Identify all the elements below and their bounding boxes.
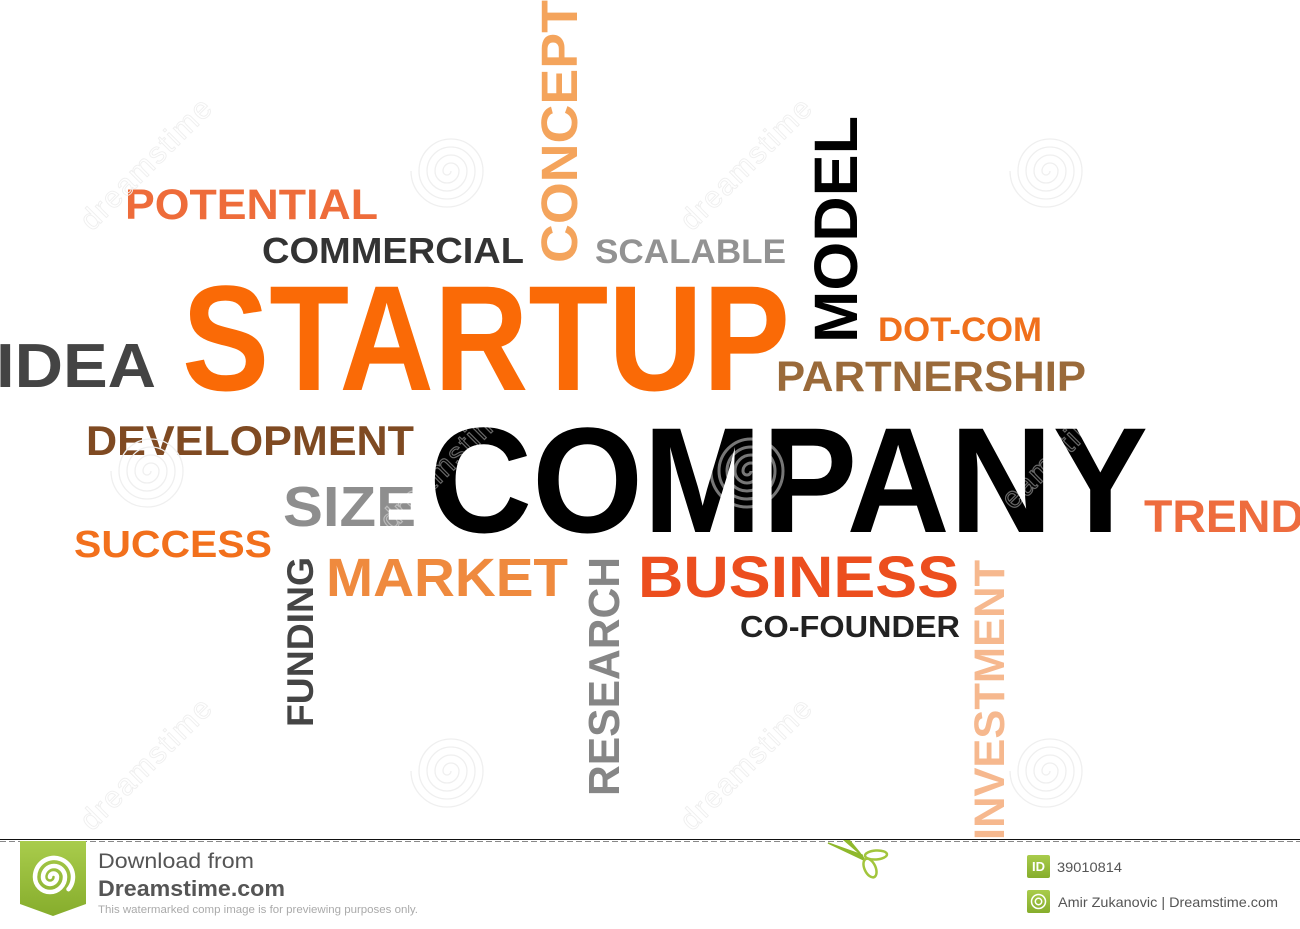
footer divider [0, 840, 1300, 842]
watermark text 1: dreamstime [74, 92, 219, 237]
word: COMPANY: COMPANY [429, 396, 1148, 564]
footer text: author credit: Amir Zukanovic | Dreamstime.com [1058, 894, 1278, 910]
footer text: preview notice: This watermarked comp image is for previewing purposes only. [98, 904, 418, 916]
word: SUCCESS: SUCCESS [74, 524, 272, 566]
icon: scissors [828, 840, 887, 879]
footer text: download from: Download from [98, 850, 254, 873]
watermark pattern on white [74, 92, 1082, 837]
word: DOT-COM: DOT-COM [878, 311, 1042, 349]
word: MODEL: MODEL [802, 116, 870, 343]
word: PARTNERSHIP: PARTNERSHIP [776, 353, 1086, 401]
word: BUSINESS: BUSINESS [638, 545, 959, 610]
watermark spiral bottom centre [411, 739, 483, 807]
watermark text 4: dreamstime [674, 692, 819, 837]
word: POTENTIAL: POTENTIAL [125, 181, 378, 229]
word: RESEARCH: RESEARCH [580, 557, 629, 796]
word: TREND: TREND [1144, 491, 1300, 542]
icon: copyright badge [1027, 890, 1050, 913]
icon: green ribbon badge [20, 841, 86, 916]
watermark spiral top right [1010, 139, 1082, 207]
icon: ID badge: ID [1032, 859, 1045, 874]
word: FUNDING: FUNDING [280, 557, 321, 727]
word: INVESTMENT: INVESTMENT [966, 560, 1014, 840]
footer text: image id: 39010814 [1057, 859, 1122, 875]
icon: ID badge [1027, 855, 1050, 878]
footer text: Dreamstime.com: Dreamstime.com [98, 876, 285, 901]
word: IDEA: IDEA [0, 332, 156, 401]
word: COMMERCIAL: COMMERCIAL [262, 230, 524, 271]
watermark pattern over dark letters [383, 427, 1082, 526]
watermark text 2: dreamstime [674, 92, 819, 237]
word: STARTUP: STARTUP [182, 254, 790, 422]
watermark text on COMPANY right: dreamstime [974, 392, 1119, 537]
watermark text 3: dreamstime [74, 692, 219, 837]
word: SIZE: SIZE [283, 475, 416, 539]
watermark spiral bottom right [1010, 739, 1082, 807]
watermark spiral mid left [111, 439, 183, 507]
word: CO-FOUNDER: CO-FOUNDER [740, 609, 960, 644]
word: MARKET: MARKET [326, 548, 568, 608]
watermark spiral top centre [411, 139, 483, 207]
word: CONCEPT: CONCEPT [531, 0, 588, 263]
watermark spiral on COMPANY [711, 439, 783, 507]
word: DEVELOPMENT: DEVELOPMENT [86, 417, 414, 464]
watermark text on COMPANY left: dreamstime [374, 392, 519, 537]
word: SCALABLE: SCALABLE [595, 233, 786, 271]
